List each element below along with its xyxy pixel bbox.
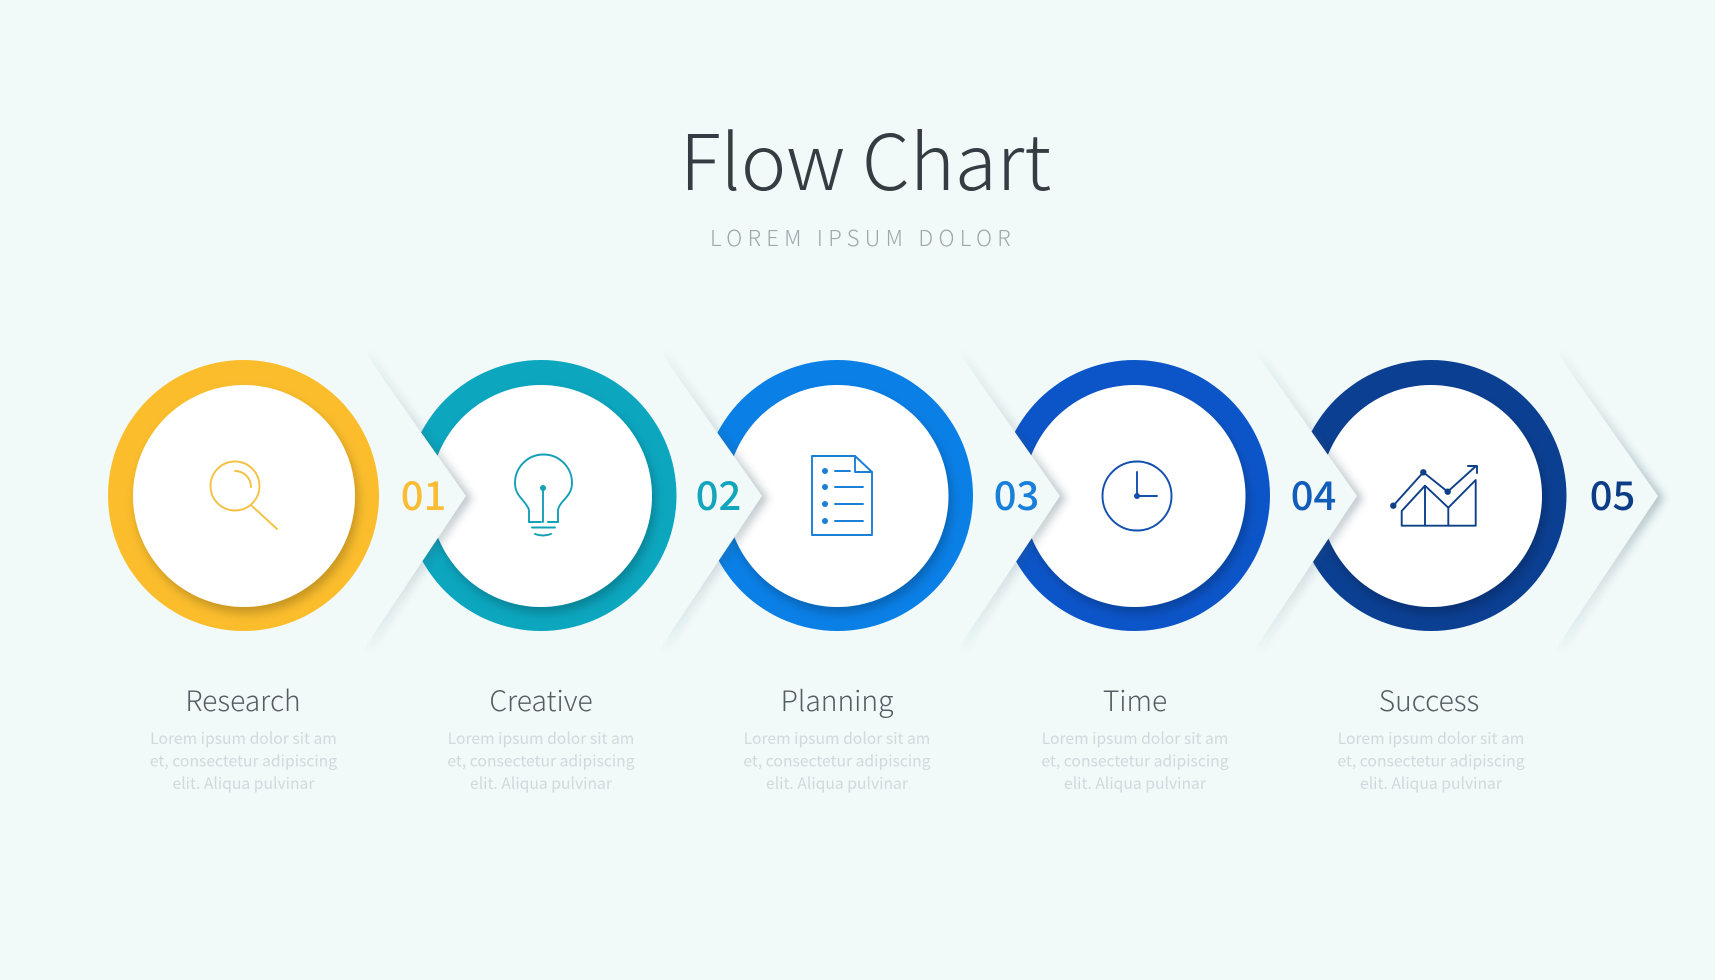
text block: Planning: Planning — [781, 679, 893, 720]
icon: growth chart — [1390, 466, 1477, 526]
subtitle: LOREM IPSUM DOLOR — [710, 221, 1016, 253]
icon: light bulb — [515, 454, 572, 536]
text block: Planning: Lorem ipsum dolor sit am — [744, 726, 930, 749]
step 3 chevron — [957, 350, 1066, 652]
step 2 chevron — [659, 350, 768, 652]
icon: magnifier — [210, 462, 277, 529]
text block: Creative: elit. Aliqua pulvinar — [470, 771, 613, 794]
text block: Research: elit. Aliqua pulvinar — [173, 771, 315, 794]
step 3 ring — [702, 360, 973, 631]
text block: Time: et, consectetur adipiscing — [1041, 748, 1229, 772]
text block: Creative: et, consectetur adipiscing — [447, 748, 635, 772]
text block: Success: Lorem ipsum dolor sit am — [1338, 726, 1524, 749]
number 05: 05 — [1590, 464, 1635, 522]
text block: Success — [1337, 679, 1525, 794]
text block: Research: Research — [185, 679, 301, 720]
text block: Time: Time — [1103, 679, 1167, 720]
text block: Planning: et, consectetur adipiscing — [743, 748, 931, 772]
step 4 chevron — [1254, 350, 1363, 652]
step 1 chevron — [363, 350, 472, 652]
text block: Planning: elit. Aliqua pulvinar — [766, 771, 909, 794]
text block: Creative: Creative — [489, 679, 593, 720]
number 01: 01 — [401, 464, 446, 522]
text block: Time: Lorem ipsum dolor sit am — [1042, 726, 1228, 749]
title: Flow Chart — [680, 102, 1051, 213]
text block: Creative: Lorem ipsum dolor sit am — [448, 726, 634, 749]
number 02: 02 — [696, 464, 741, 522]
text block: Creative — [447, 679, 635, 794]
number 04: 04 — [1291, 464, 1336, 522]
text block: Research: Lorem ipsum dolor sit am — [150, 726, 337, 749]
text block: Research: et, consectetur adipiscing — [150, 748, 337, 772]
number 03: 03 — [994, 464, 1039, 522]
text block: Time: elit. Aliqua pulvinar — [1064, 771, 1207, 794]
text block: Time — [1041, 679, 1229, 794]
icon: clock — [1102, 462, 1172, 530]
text block: Planning — [743, 679, 931, 794]
step 2 ring — [406, 360, 676, 631]
step 5 ring — [1296, 360, 1566, 631]
step 4 ring — [999, 360, 1270, 631]
text block: Success: Success — [1379, 679, 1479, 720]
text block: Success: et, consectetur adipiscing — [1337, 748, 1525, 772]
icon: document — [812, 456, 872, 535]
text block: Research — [150, 679, 337, 794]
text block: Success: elit. Aliqua pulvinar — [1360, 771, 1503, 794]
step 1 ring — [108, 360, 379, 631]
step 5 chevron — [1555, 350, 1664, 652]
